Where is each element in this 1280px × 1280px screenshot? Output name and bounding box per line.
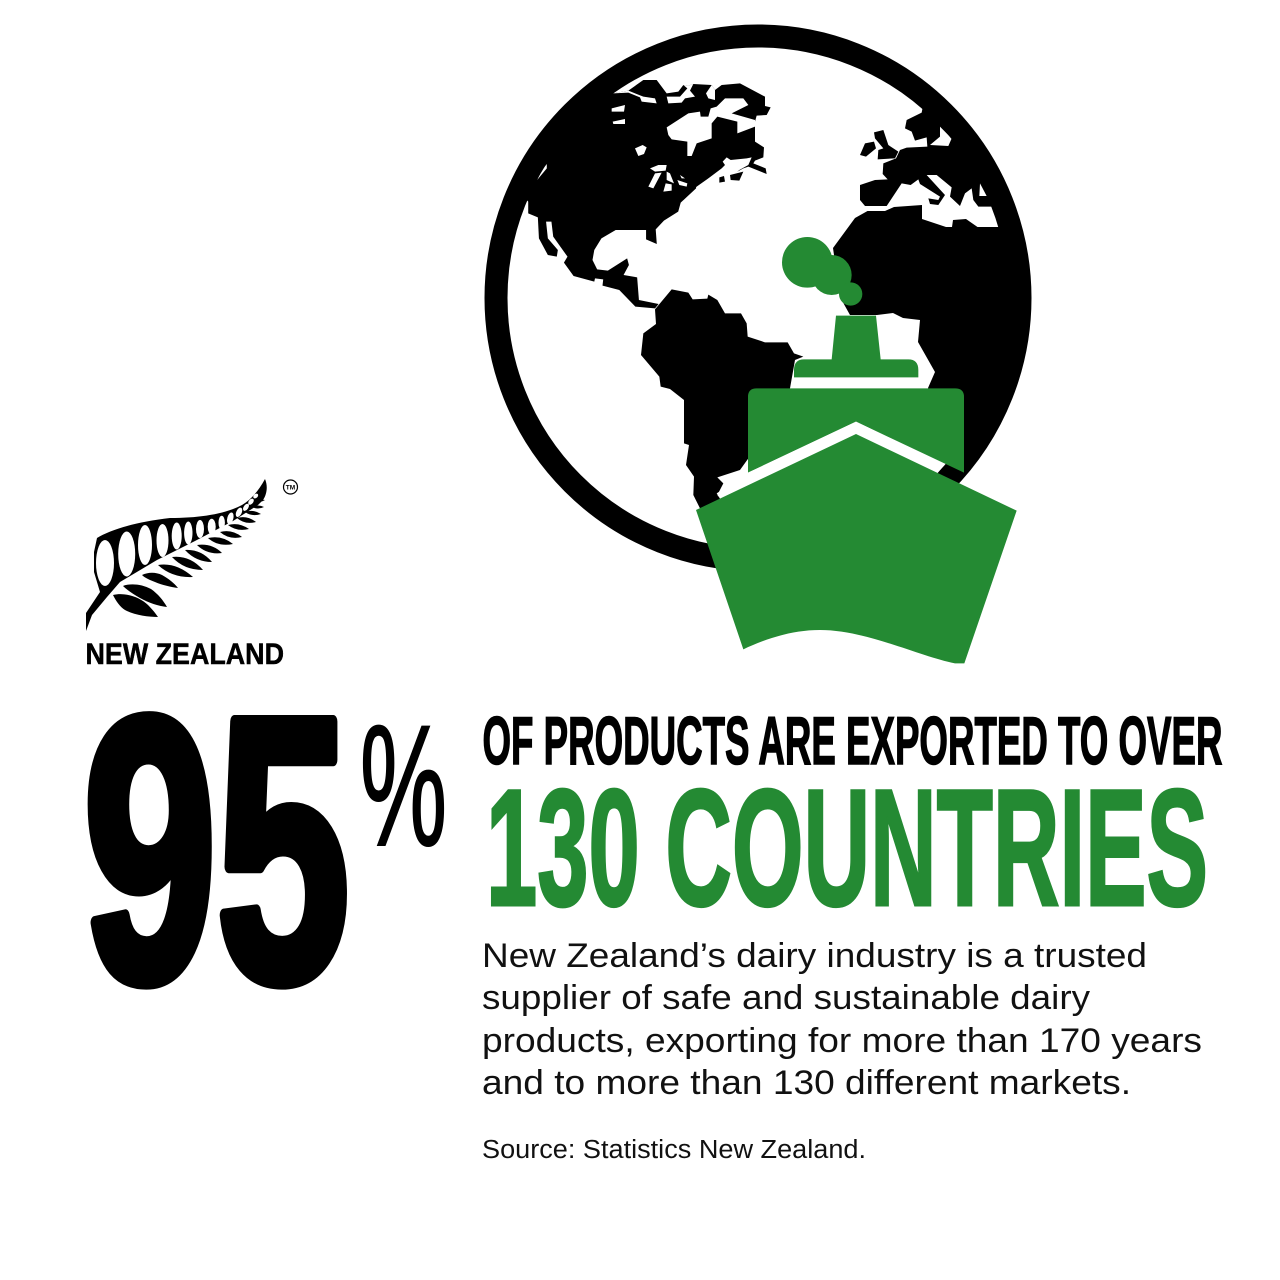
body paragraph (482, 937, 1202, 1102)
ship smoke (782, 237, 862, 306)
big statistic: 95: 95 (84, 642, 350, 1060)
ship hull (696, 434, 1017, 663)
land: southern North America (527, 118, 696, 308)
fern lower leaves (113, 500, 265, 617)
body paragraph: New Zealand’s dairy industry is a trusted (482, 937, 1147, 975)
source note: Source: Statistics New Zealand. (482, 1136, 866, 1164)
globe outline ring (496, 36, 1020, 560)
trademark mark: TM (286, 484, 295, 492)
white chevron (717, 422, 945, 498)
fern white ovals (96, 493, 259, 586)
body paragraph: products, exporting for more than 170 years (482, 1022, 1202, 1060)
logo wordmark: NEW ZEALAND (86, 638, 284, 671)
land: Europe (860, 108, 992, 207)
body paragraph: supplier of safe and sustainable dairy (482, 979, 1090, 1017)
ship cabin (748, 388, 964, 473)
ship funnel and deck (794, 316, 918, 377)
icon: globe (496, 36, 1040, 560)
trademark mark (284, 480, 298, 494)
land: northern North America (583, 80, 771, 200)
land: South America (641, 289, 803, 520)
infographic canvas (86, 24, 1222, 1158)
fern upper frond and stem (86, 479, 267, 631)
land: Africa and Asia (833, 205, 1008, 440)
logo: New Zealand fern (86, 479, 298, 671)
body paragraph: and to more than 130 different markets. (482, 1064, 1131, 1102)
icon: cargo ship (696, 237, 1017, 663)
percent sign: % (360, 690, 447, 882)
